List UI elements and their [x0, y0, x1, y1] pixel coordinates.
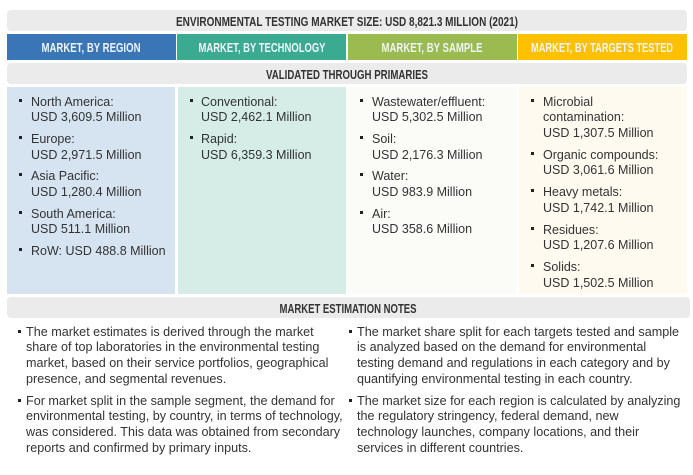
notes: left column: For market split in the sample segment, the demand for: [26, 394, 335, 408]
header: market by technology: MARKET, BY TECHNOLOGY: [198, 40, 326, 55]
notes: right column: is analyzed based on the demand for environmental: [357, 340, 646, 354]
panel: region: USD 511.1 Million: [31, 222, 130, 236]
panel: technology: Rapid:: [201, 132, 237, 146]
panel: targets tested: Heavy metals:: [543, 185, 622, 199]
panel: targets tested: USD 1,307.5 Million: [543, 126, 654, 140]
notes: left column: market, based on their service portfolios, geographical: [26, 356, 328, 370]
panel: sample: Soil:: [372, 132, 396, 146]
panel: region: USD 3,609.5 Million: [31, 110, 142, 124]
validated through primaries bar: [7, 63, 687, 84]
panel: sample: [348, 87, 516, 294]
panel: targets tested: contamination:: [543, 110, 624, 124]
notes: right column: technology launches, company locations, and their: [357, 425, 639, 439]
header: market by region: MARKET, BY REGION: [42, 40, 140, 55]
panel: sample: Air:: [372, 207, 391, 221]
panel: targets tested: Microbial: [543, 95, 593, 109]
notes: left column: presence, and segmental revenues.: [26, 372, 226, 386]
header: market by region: [7, 34, 176, 60]
market estimation notes bar: [7, 297, 690, 318]
header: market by sample: MARKET, BY SAMPLE: [382, 40, 483, 55]
validated through primaries bar: VALIDATED THROUGH PRIMARIES: [266, 67, 428, 82]
panel: targets tested: [519, 87, 687, 294]
notes: right column: the regulatory stringency, federal demand, new: [357, 409, 619, 423]
header: market by sample: [348, 34, 517, 60]
notes: left column: reports and confirmed by primary inputs.: [26, 441, 251, 455]
panel: targets tested: USD 1,742.1 Million: [543, 201, 654, 215]
title bar: [7, 10, 687, 31]
market estimation notes bar: MARKET ESTIMATION NOTES: [280, 301, 417, 316]
panel: region: Europe:: [31, 132, 75, 146]
panel: sample: Wastewater/effluent:: [372, 95, 485, 109]
panel: targets tested: Organic compounds:: [543, 148, 658, 162]
panel: targets tested: USD 1,207.6 Million: [543, 238, 654, 252]
panel: region: North America:: [31, 95, 114, 109]
header: market by targets tested: [518, 34, 687, 60]
panel: region: South America:: [31, 207, 116, 221]
panel: sample: USD 983.9 Million: [372, 185, 472, 199]
notes: left column: was considered. This data was obtained from secondary: [25, 425, 341, 439]
notes: right column: quantifying environmental testing in each country.: [357, 372, 633, 386]
panel: region: Asia Pacific:: [31, 169, 99, 183]
notes: left column: environmental testing, by country, in terms of technology,: [26, 409, 343, 423]
panel: technology: Conventional:: [201, 95, 277, 109]
panel: sample: Water:: [372, 169, 408, 183]
panel: region: RoW: USD 488.8 Million: [31, 244, 166, 258]
panel: technology: USD 6,359.3 Million: [201, 148, 312, 162]
panel: sample: USD 5,302.5 Million: [372, 110, 483, 124]
panel: targets tested: USD 3,061.6 Million: [543, 163, 654, 177]
notes: left column: The market estimates is derived through the market: [26, 325, 314, 339]
notes: right column: The market share split for each targets tested and sample: [357, 325, 679, 339]
notes: right column: services in different countries.: [357, 441, 523, 455]
notes: left column: [18, 325, 343, 455]
notes: right column: [349, 325, 680, 455]
panel: region: USD 2,971.5 Million: [31, 148, 142, 162]
panel: targets tested: USD 1,502.5 Million: [543, 276, 654, 290]
panel: technology: [178, 87, 346, 294]
panel: sample: USD 2,176.3 Million: [372, 148, 483, 162]
notes: right column: testing demand and regulations in each category and by: [357, 356, 671, 370]
panel: sample: USD 358.6 Million: [372, 222, 472, 236]
notes: right column: The market size for each region is calculated by analyzing: [357, 394, 680, 408]
panel: technology: USD 2,462.1 Million: [201, 110, 312, 124]
panel: targets tested: Solids:: [543, 260, 581, 274]
panel: region: USD 1,280.4 Million: [31, 185, 142, 199]
panel: targets tested: Residues:: [543, 223, 599, 237]
title bar: ENVIRONMENTAL TESTING MARKET SIZE: USD 8,821.3 MILLION (2021): [176, 14, 518, 29]
panel: region: [7, 87, 175, 294]
header: market by technology: [177, 34, 346, 60]
notes: left column: share of top laboratories in the environmental testing: [26, 340, 319, 354]
